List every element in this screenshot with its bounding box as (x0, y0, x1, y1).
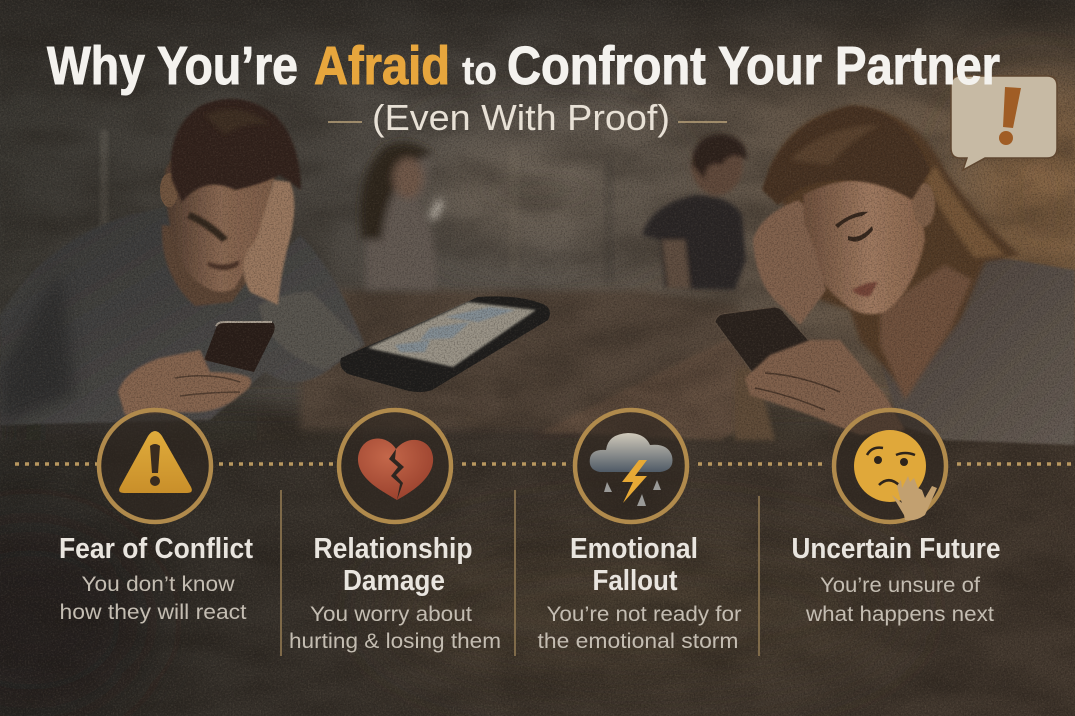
description (805, 574, 994, 626)
hair top (762, 106, 930, 205)
description: You’re unsure of (820, 574, 980, 597)
item: emotional fallout (538, 410, 742, 653)
description: You worry about (310, 603, 472, 626)
heading: Emotional (570, 533, 698, 565)
speech bubble with exclamation mark (951, 76, 1057, 170)
cardigan (880, 255, 1075, 445)
phone in hand (204, 322, 275, 372)
ear (913, 183, 935, 227)
description: You’re not ready for (546, 603, 742, 626)
description (538, 603, 742, 653)
phone lying on table (340, 296, 550, 392)
heading: Relationship (314, 533, 472, 565)
item: relationship damage (289, 410, 501, 653)
lower hand (118, 350, 251, 415)
ear (160, 173, 178, 207)
description (289, 603, 501, 653)
lower hand (745, 340, 905, 435)
long hair behind (770, 106, 1020, 390)
icon: worried face with hand (834, 410, 946, 522)
item: fear of conflict (59, 410, 253, 624)
item: emotional fallout: Fallout (592, 565, 678, 597)
column dividers (281, 490, 759, 656)
neck and chest (880, 265, 972, 400)
background figure: blurred man from behind (642, 134, 747, 290)
phone in hand (715, 307, 813, 372)
raised hand (753, 200, 826, 325)
heading: Fear of Conflict (59, 533, 253, 565)
title (47, 36, 1000, 96)
icon: storm cloud (575, 410, 687, 522)
face (165, 128, 275, 292)
item: uncertain future (792, 410, 1000, 626)
title: to (462, 49, 497, 93)
item: relationship damage: Damage (343, 565, 445, 597)
title: Why You’re (47, 36, 298, 96)
sweater (0, 207, 365, 425)
description: the emotional storm (538, 630, 738, 653)
title: Afraid (314, 36, 450, 96)
description (60, 573, 247, 624)
heading: Uncertain Future (792, 533, 1000, 565)
neck (162, 225, 248, 306)
title: Confront Your Partner (507, 36, 1000, 96)
description: hurting & losing them (289, 630, 501, 653)
man with phone (0, 99, 365, 425)
table surface (300, 290, 740, 430)
subtitle with side rules: (Even With Proof) (372, 97, 670, 138)
face (803, 180, 925, 314)
description: You don’t know (82, 573, 235, 596)
description: how they will react (60, 601, 247, 624)
background figure: blurred woman with phone (360, 142, 444, 290)
woman with phone (715, 106, 1075, 445)
icon: broken heart (339, 410, 451, 522)
icon: warning triangle (99, 410, 211, 522)
description: what happens next (805, 603, 994, 626)
dotted timeline (15, 462, 1075, 466)
raised hand (243, 180, 294, 305)
hair (171, 99, 301, 202)
